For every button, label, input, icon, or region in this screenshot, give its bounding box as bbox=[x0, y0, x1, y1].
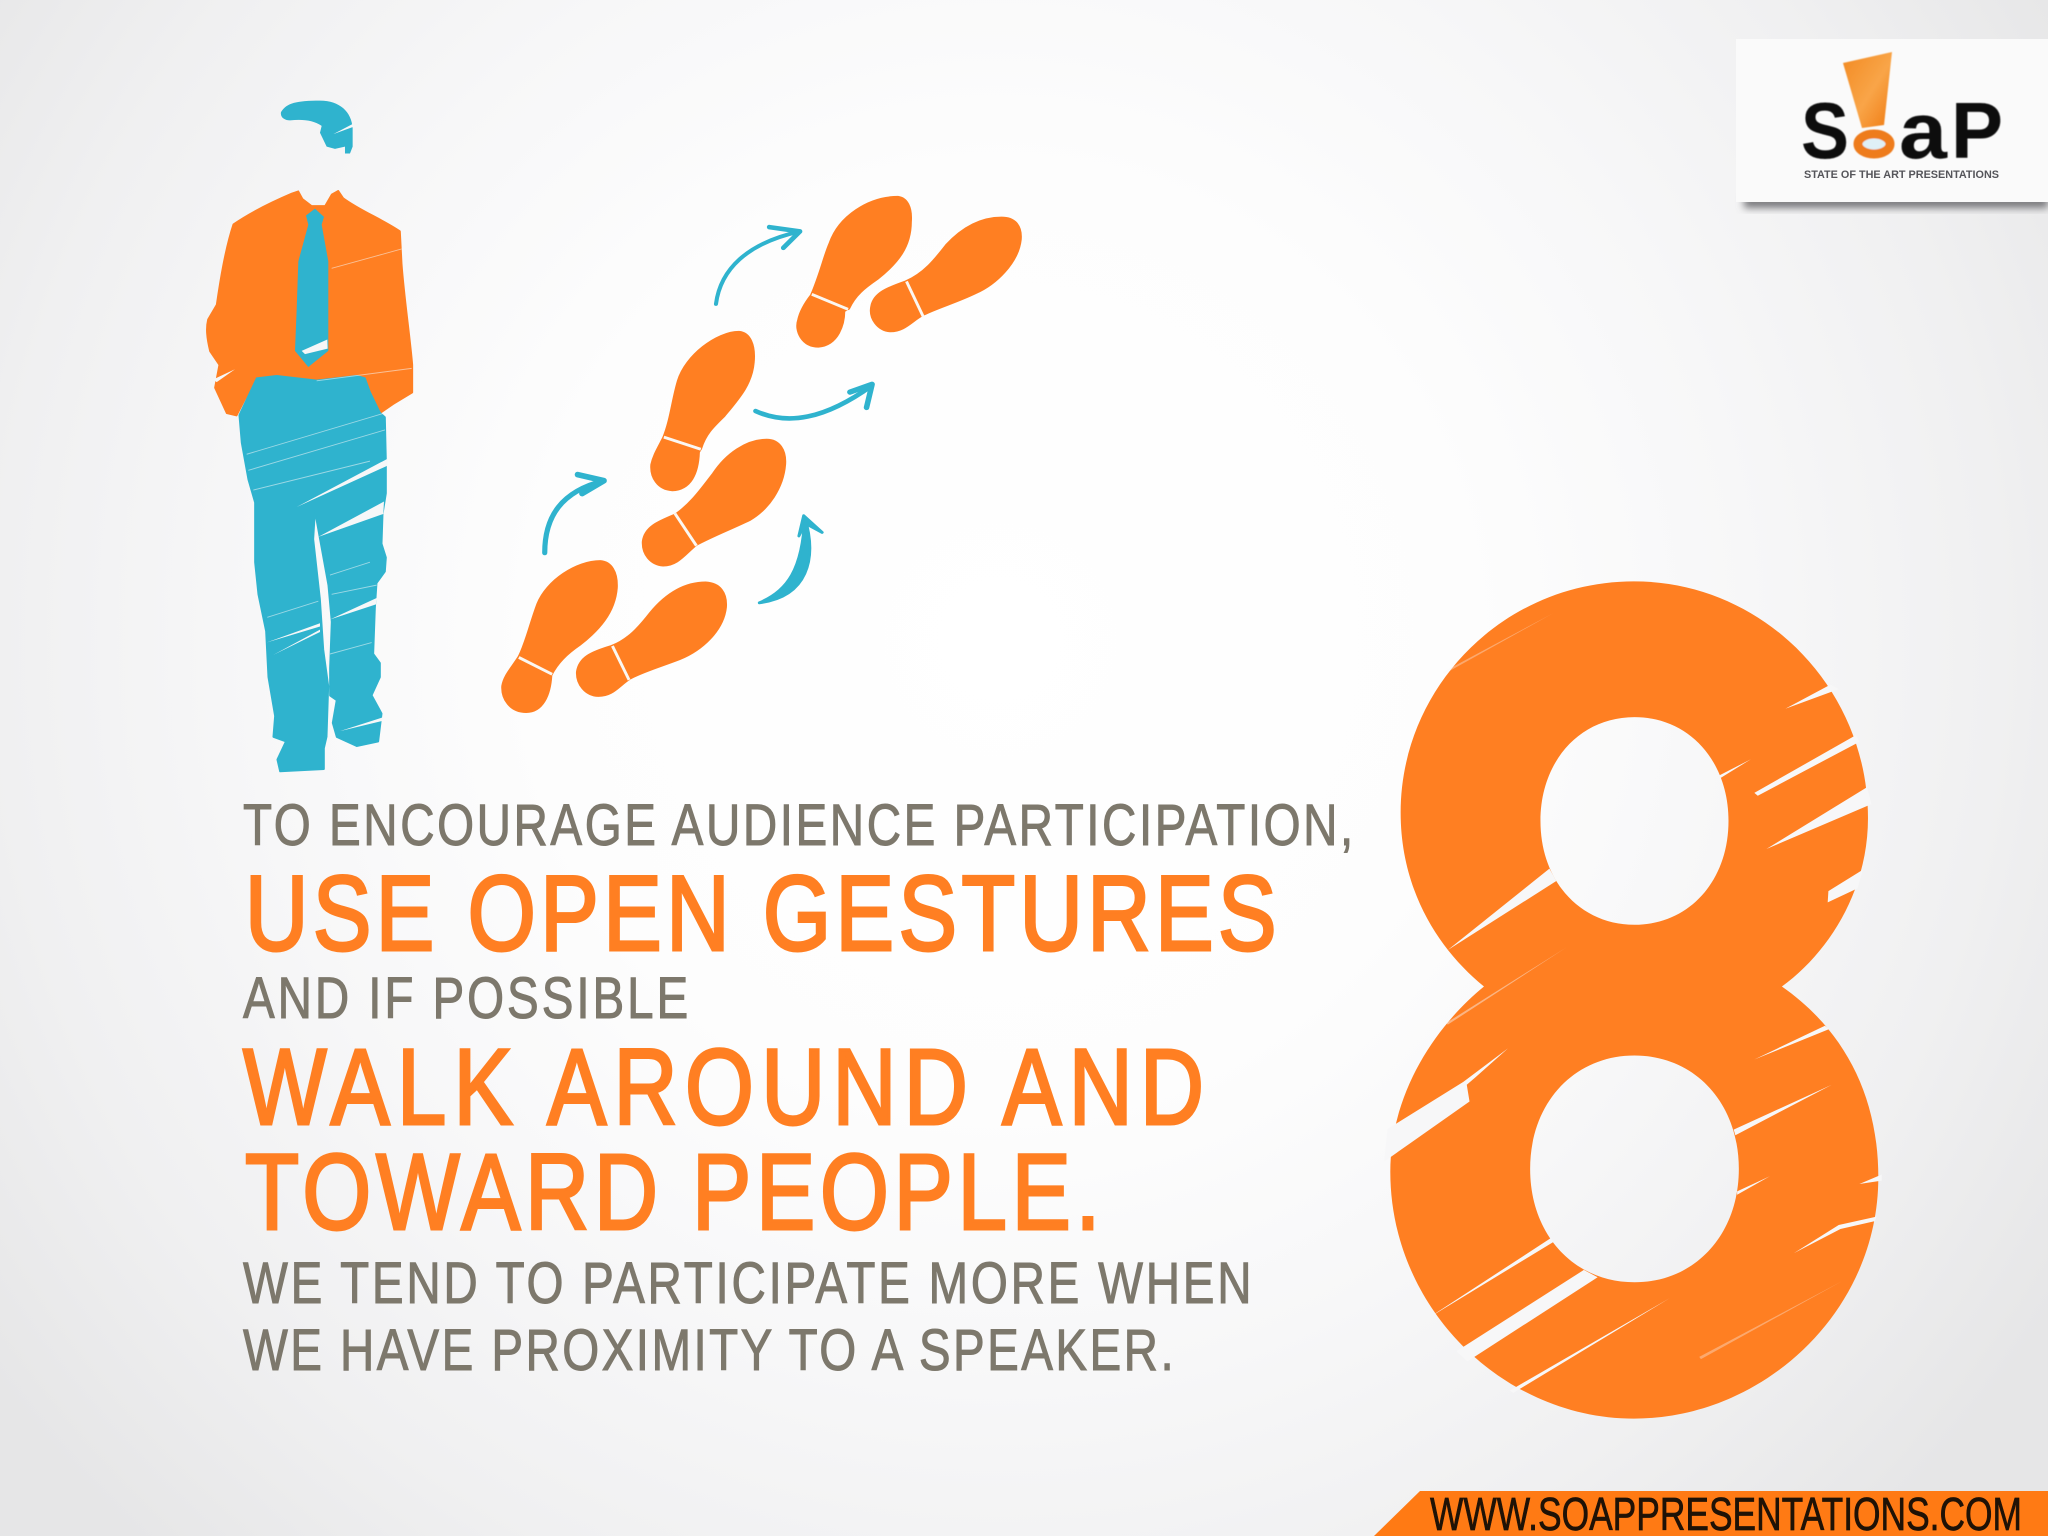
intro line: TO ENCOURAGE AUDIENCE PARTICIPATION, bbox=[243, 794, 1353, 858]
highlight: toward people: TOWARD PEOPLE. bbox=[245, 1132, 1100, 1252]
logo wordmark: a bbox=[1899, 86, 1948, 175]
closing line 1: WE TEND TO PARTICIPATE MORE WHEN bbox=[243, 1252, 1252, 1316]
footprint: top right bbox=[871, 217, 1021, 331]
brush scratches on 8 bbox=[1384, 613, 1882, 1393]
footprint: bottom left bbox=[502, 561, 617, 712]
highlight: walk around: WALK AROUND AND bbox=[243, 1027, 1204, 1147]
logo card bbox=[1736, 39, 2048, 208]
closing line 2: WE HAVE PROXIMITY TO A SPEAKER. bbox=[243, 1319, 1174, 1383]
arrow: lower right bbox=[759, 516, 822, 603]
logo wordmark bbox=[1801, 86, 2003, 175]
logo wordmark: S bbox=[1801, 86, 1849, 175]
headline text block bbox=[243, 794, 1353, 1383]
big number 8 bbox=[1384, 581, 1882, 1419]
footprint: top left bbox=[797, 197, 911, 347]
connector line: AND IF POSSIBLE bbox=[243, 967, 688, 1031]
shirt bbox=[207, 191, 412, 415]
logo tagline: STATE OF THE ART PRESENTATIONS bbox=[1804, 169, 1999, 181]
footprint: middle right bbox=[643, 440, 785, 566]
logo exclamation mark bbox=[1843, 52, 1892, 128]
figure: man in orange shirt and blue trousers bbox=[207, 101, 412, 771]
trousers bbox=[239, 376, 386, 771]
arrow: right bbox=[756, 384, 872, 418]
brush scratches on figure bbox=[213, 124, 387, 731]
highlight: use open gestures: USE OPEN GESTURES bbox=[245, 853, 1277, 973]
footprint: middle left bbox=[651, 332, 754, 490]
footprint: bottom right bbox=[577, 582, 726, 696]
footer banner bbox=[1374, 1488, 2048, 1536]
tie bbox=[295, 209, 328, 367]
arrow: top bbox=[716, 227, 800, 304]
logo wordmark: P bbox=[1951, 86, 2003, 175]
arrow: left bbox=[545, 475, 604, 553]
footprints and arrows bbox=[502, 197, 1021, 712]
hair bbox=[281, 101, 353, 153]
